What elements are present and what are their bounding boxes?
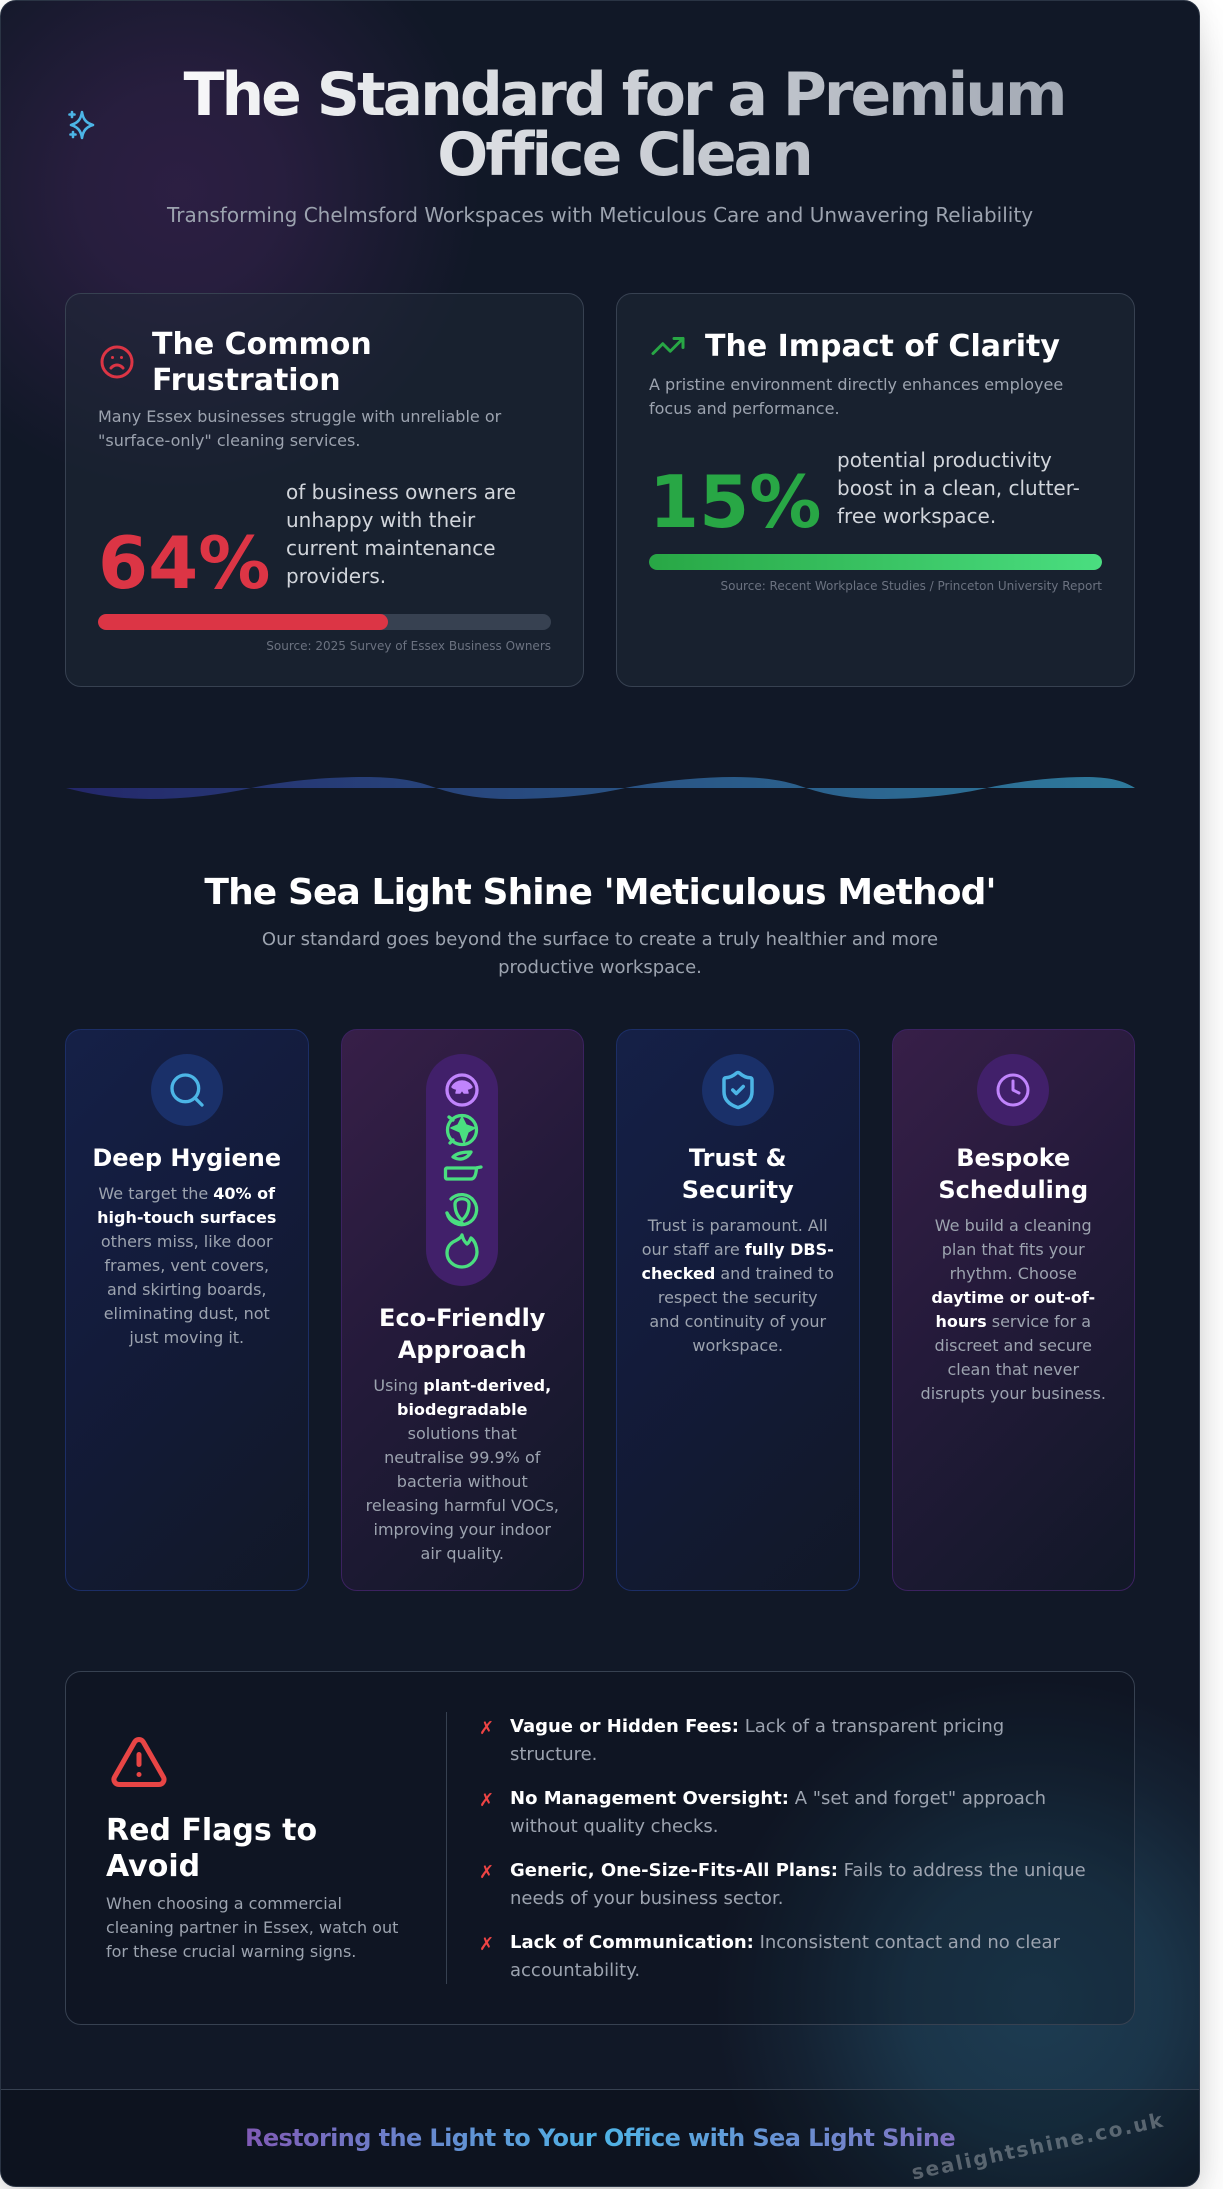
body bbox=[97, 1184, 276, 1347]
body: others miss, like door bbox=[101, 1232, 273, 1251]
body: Trust is paramount. All bbox=[648, 1216, 828, 1235]
body: workspace. bbox=[692, 1336, 783, 1355]
red flag item bbox=[479, 1788, 1046, 1837]
description bbox=[98, 407, 502, 450]
heading bbox=[152, 327, 372, 398]
description: When choosing a commercial bbox=[106, 1894, 342, 1913]
section subtitle: Our standard goes beyond the surface to create a truly healthier and more bbox=[262, 929, 938, 950]
stat text: potential productivity bbox=[837, 448, 1052, 472]
icon: sparkles bbox=[68, 110, 94, 140]
description bbox=[106, 1894, 398, 1961]
body: plan that fits your bbox=[942, 1240, 1085, 1259]
body: discreet and secure bbox=[935, 1336, 1092, 1355]
panel: trust and security bbox=[616, 1029, 860, 1591]
body: Using plant-derived, bbox=[373, 1376, 551, 1395]
heading: Eco-Friendly bbox=[379, 1304, 545, 1332]
heading bbox=[938, 1144, 1088, 1204]
description: cleaning partner in Essex, watch out bbox=[106, 1918, 398, 1937]
description bbox=[649, 375, 1063, 418]
red flag item: accountability. bbox=[510, 1960, 640, 1981]
body: respect the security bbox=[658, 1288, 818, 1307]
red flag item: No Management Oversight: A "set and forget" approach bbox=[510, 1788, 1046, 1809]
body: solutions that bbox=[408, 1424, 517, 1443]
icons: eco stack bbox=[426, 1054, 498, 1286]
body: checked and trained to bbox=[642, 1264, 834, 1283]
panel: red flags bbox=[65, 1671, 1135, 2025]
subtitle: Transforming Chelmsford Workspaces with Meticulous Care and Unwavering Reliability bbox=[167, 203, 1033, 227]
red flag item: ✗ bbox=[479, 1934, 494, 1955]
red flag item bbox=[479, 1860, 1086, 1909]
heading: The Impact of Clarity bbox=[705, 329, 1060, 364]
title bbox=[112, 65, 1136, 185]
header bbox=[68, 60, 1064, 227]
icon: shield bbox=[702, 1054, 774, 1126]
heading bbox=[379, 1304, 545, 1364]
red flag item: Vague or Hidden Fees: Lack of a transparent pricing bbox=[510, 1716, 1004, 1737]
panel: the impact of clarity bbox=[616, 293, 1135, 687]
body: We target the 40% of bbox=[98, 1184, 275, 1203]
heading: Scheduling bbox=[938, 1176, 1088, 1204]
red flag item: structure. bbox=[510, 1744, 597, 1765]
stat text bbox=[286, 480, 516, 588]
progress bar bbox=[98, 614, 551, 630]
stat text bbox=[837, 448, 1080, 528]
icon: trending up bbox=[651, 336, 684, 356]
heading: Avoid bbox=[106, 1849, 200, 1884]
description: A pristine environment directly enhances employee bbox=[649, 375, 1063, 394]
section subtitle: productive workspace. bbox=[498, 957, 702, 978]
body bbox=[366, 1376, 559, 1563]
body: neutralise 99.9% of bbox=[384, 1448, 540, 1467]
panel: deep hygiene bbox=[65, 1029, 308, 1591]
stat: 15%: 15% bbox=[649, 460, 821, 544]
stat text: unhappy with their bbox=[286, 508, 475, 532]
panel: bespoke scheduling bbox=[892, 1029, 1135, 1591]
red flag item: without quality checks. bbox=[510, 1816, 718, 1837]
body: air quality. bbox=[421, 1544, 504, 1563]
stat text: current maintenance bbox=[286, 536, 496, 560]
watermark: sealightshine.co.uk bbox=[909, 2107, 1167, 2185]
red flag item: Lack of Communication: Inconsistent contact and no clear bbox=[510, 1932, 1060, 1953]
panel: eco-friendly approach bbox=[340, 1029, 584, 1591]
stat: 64%: 64% bbox=[98, 521, 270, 605]
body: clean that never bbox=[947, 1360, 1079, 1379]
source: Source: 2025 Survey of Essex Business Owners bbox=[266, 639, 551, 653]
icon: search bbox=[151, 1054, 223, 1126]
body: hours service for a bbox=[935, 1312, 1091, 1331]
red flag item: needs of your business sector. bbox=[510, 1888, 783, 1909]
red flag item bbox=[479, 1932, 1060, 1981]
description: focus and performance. bbox=[649, 399, 840, 418]
heading: Trust & bbox=[689, 1144, 787, 1172]
body: disrupts your business. bbox=[921, 1384, 1106, 1403]
title: Office Clean bbox=[437, 120, 811, 190]
icon: clock bbox=[977, 1054, 1049, 1126]
section subtitle bbox=[262, 929, 938, 978]
icon: warning triangle bbox=[111, 1737, 167, 1787]
title: The Standard for a Premium bbox=[184, 60, 1064, 130]
stat text: of business owners are bbox=[286, 480, 516, 504]
divider bbox=[446, 1712, 447, 1984]
body: biodegradable bbox=[397, 1400, 527, 1419]
body: high-touch surfaces bbox=[97, 1208, 276, 1227]
body: eliminating dust, not bbox=[104, 1304, 270, 1323]
heading: Security bbox=[682, 1176, 794, 1204]
heading bbox=[106, 1813, 317, 1884]
body: bacteria without bbox=[397, 1472, 528, 1491]
heading: Red Flags to bbox=[106, 1813, 317, 1848]
red flag item: ✗ bbox=[479, 1790, 494, 1811]
heading: Bespoke bbox=[956, 1144, 1070, 1172]
body: We build a cleaning bbox=[935, 1216, 1092, 1235]
heading: Frustration bbox=[152, 363, 341, 398]
description: "surface-only" cleaning services. bbox=[98, 431, 360, 450]
red flag item: Generic, One-Size-Fits-All Plans: Fails to address the unique bbox=[510, 1860, 1086, 1881]
section heading: The Sea Light Shine 'Meticulous Method' bbox=[204, 872, 996, 913]
stat text: free workspace. bbox=[837, 504, 996, 528]
stat text: providers. bbox=[286, 564, 386, 588]
body: and skirting boards, bbox=[107, 1280, 267, 1299]
source: Source: Recent Workplace Studies / Princeton University Report bbox=[720, 579, 1102, 593]
body: rhythm. Choose bbox=[950, 1264, 1077, 1283]
description: for these crucial warning signs. bbox=[106, 1942, 356, 1961]
heading: Deep Hygiene bbox=[92, 1144, 281, 1172]
icon: sad face bbox=[100, 346, 134, 378]
body: just moving it. bbox=[129, 1328, 244, 1347]
red flag item bbox=[479, 1716, 1004, 1765]
body: frames, vent covers, bbox=[104, 1256, 269, 1275]
footer tagline: Restoring the Light to Your Office with Sea Light Shine bbox=[245, 2124, 955, 2152]
wave divider bbox=[66, 777, 1135, 799]
red flag item: ✗ bbox=[479, 1862, 494, 1883]
heading: Approach bbox=[398, 1336, 527, 1364]
body: and continuity of your bbox=[649, 1312, 826, 1331]
red flag item: ✗ bbox=[479, 1718, 494, 1739]
stat text: boost in a clean, clutter- bbox=[837, 476, 1080, 500]
body bbox=[921, 1216, 1106, 1403]
body bbox=[642, 1216, 834, 1355]
panel: the common frustration bbox=[65, 293, 584, 687]
footer bbox=[1, 2089, 1199, 2186]
body: improving your indoor bbox=[374, 1520, 551, 1539]
heading bbox=[682, 1144, 794, 1204]
description: Many Essex businesses struggle with unreliable or bbox=[98, 407, 501, 426]
body: daytime or out-of- bbox=[931, 1288, 1095, 1307]
body: releasing harmful VOCs, bbox=[366, 1496, 559, 1515]
heading: The Common bbox=[152, 327, 372, 362]
body: our staff are fully DBS- bbox=[642, 1240, 834, 1259]
progress bar bbox=[649, 554, 1102, 570]
